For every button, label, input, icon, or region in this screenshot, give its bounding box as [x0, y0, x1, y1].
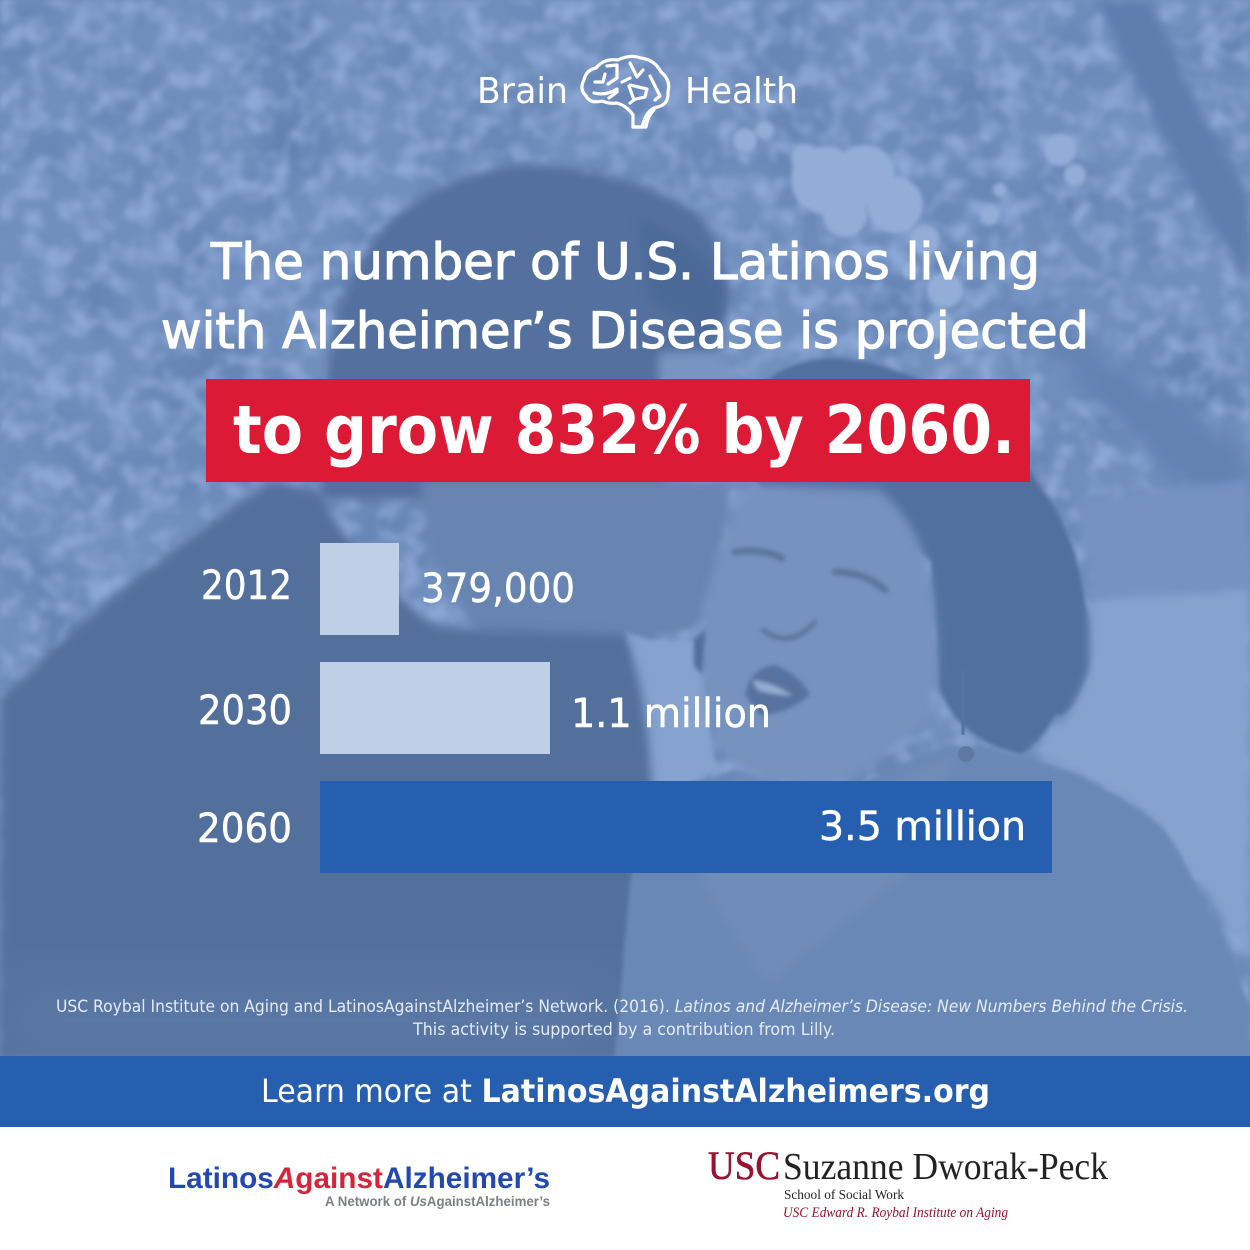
- icon: brain: [582, 56, 669, 127]
- logo: USC Suzanne Dworak-Peck: [708, 1143, 1108, 1221]
- label: Brain: Brain: [477, 71, 568, 112]
- bar: 2060: 3.5 million: [819, 804, 1026, 850]
- bar: 2030: 1.1 million: [571, 691, 771, 737]
- boy shirt: [0, 482, 652, 1060]
- bar chart: [197, 543, 1052, 873]
- logo: USC Suzanne Dworak-Peck: USC Edward R. Roybal Institute on Aging: [783, 1205, 1008, 1221]
- citation: [56, 997, 1188, 1040]
- footer: [0, 1127, 1250, 1250]
- bar: 2030: 2030: [198, 688, 292, 734]
- bar: 2030: [198, 662, 771, 754]
- bar: 2012: 379,000: [421, 566, 575, 612]
- light garden patch behind shoulder: [625, 632, 715, 800]
- logo: LatinosAgainstAlzheimer's: A Network of UsAgainstAlzheimer’s: [325, 1194, 550, 1209]
- header: Brain Health: [477, 56, 798, 127]
- bar: 2060: [197, 781, 1052, 873]
- banner: learn more: [0, 1056, 1250, 1127]
- logo: USC Suzanne Dworak-Peck: School of Social Work: [784, 1188, 904, 1203]
- banner: learn more: Learn more at LatinosAgainstAlzheimers.org: [261, 1072, 990, 1110]
- bar: 2012: [201, 543, 575, 635]
- logo: USC Suzanne Dworak-Peck: USC: [708, 1143, 780, 1188]
- citation line 1: USC Roybal Institute on Aging and LatinosAgainstAlzheimer’s Network. (2016). Latinos and Alzheimer’s Disease: New Numbers Behind the Crisis.: [56, 997, 1188, 1017]
- headline line 1: The number of U.S. Latinos living: [210, 233, 1040, 291]
- citation line 2: This activity is supported by a contribution from Lilly.: [412, 1020, 835, 1040]
- logo: LatinosAgainstAlzheimer's: LatinosAgainstAlzheimer’s: [168, 1162, 550, 1195]
- woman's hair: [745, 358, 1094, 755]
- headline: [161, 233, 1089, 360]
- callout: to grow 832% by 2060: to grow 832% by 2060.: [233, 391, 1015, 469]
- logo: USC Suzanne Dworak-Peck: Suzanne Dworak-Peck: [783, 1146, 1108, 1188]
- bar: 2012: 2012: [201, 563, 292, 609]
- boy hair: [320, 165, 727, 500]
- headline line 2: with Alzheimer’s Disease is projected: [161, 302, 1089, 360]
- callout: to grow 832% by 2060: [206, 379, 1030, 482]
- right garden: [1030, 587, 1250, 960]
- woman's facial features: [735, 551, 885, 638]
- woman's face: [700, 485, 936, 790]
- boy face: [420, 480, 728, 645]
- woman's body: [615, 745, 1250, 1060]
- bar: 2060: 2060: [197, 806, 292, 852]
- label: Health: Health: [685, 71, 798, 112]
